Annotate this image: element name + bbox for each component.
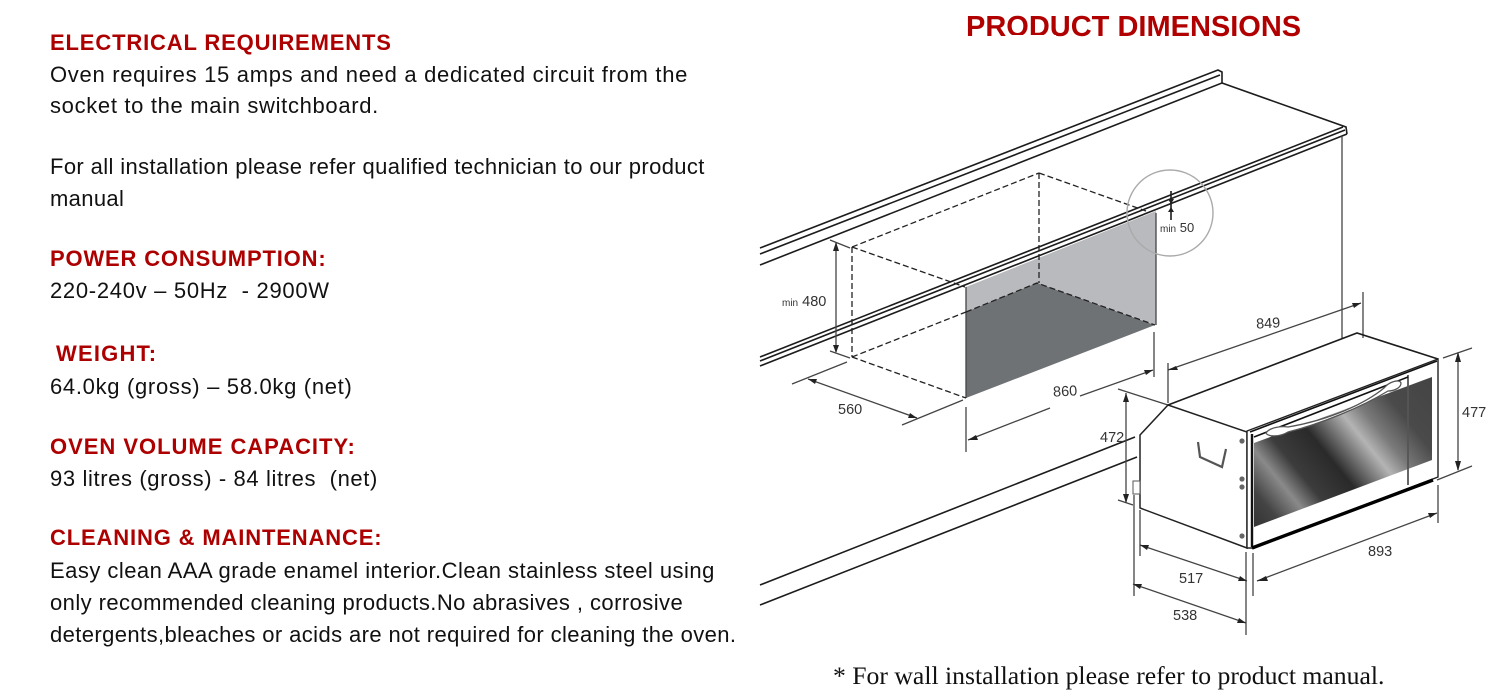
text: weight values: 64.0kg (gross) – 58.0kg (net) [50,374,352,399]
dimension: 517: 517 [1179,571,1203,587]
dimension: 860 [966,332,1154,452]
callout: min 50 clearance: min 50 [1160,220,1194,235]
panel: power consumption [50,246,330,303]
text: cleaning line three: detergents,bleaches or acids are not required for cleaning the oven. [50,622,736,647]
heading: power consumption: POWER CONSUMPTION: [50,246,326,271]
heading: electrical requirements: ELECTRICAL REQUIREMENTS [50,30,392,55]
text: cleaning line one: Easy clean AAA grade enamel interior.Clean stainless steel using [50,558,715,583]
countertop [760,70,1347,366]
dimension: 860: 860 [1053,383,1078,401]
dimension: 538: 538 [1173,608,1197,624]
dimension: 472 [1100,389,1168,505]
dimension: 849: 849 [1256,315,1281,333]
panel: cleaning and maintenance [50,525,736,647]
footnote: wall installation: * For wall installation please refer to product manual. [833,661,1384,690]
dimension: 849 [1168,292,1363,403]
dimension: 560 [792,362,963,425]
title: product dimensions: PRODUCT DIMENSIONS [966,11,1301,43]
dimension: 472: 472 [1100,430,1124,446]
text: cleaning line two: only recommended cleaning products.No abrasives , corrosive [50,590,683,615]
panel: weight [50,341,352,399]
panel: electrical requirements [50,30,705,211]
callout: min 50 clearance [1127,170,1213,256]
oven door handle [1266,381,1401,436]
text: installation note line two: manual [50,186,124,211]
heading: weight: WEIGHT: [56,341,157,366]
text: circuit requirement: Oven requires 15 amps and need a dedicated circuit from the [50,62,688,87]
text: volume values: 93 litres (gross) - 84 litres (net) [50,466,378,491]
text: circuit requirement line two: socket to the main switchboard. [50,93,379,118]
dimension: 517 [1140,510,1247,635]
text: power values: 220-240v – 50Hz - 2900W [50,278,330,303]
dimension: 560: 560 [838,402,862,418]
dimension: 477 [1437,348,1486,480]
oven front with glass door [1247,359,1438,548]
dimension: 477: 477 [1462,405,1486,421]
lower bench lines [760,437,1137,605]
dimension: min 480: min 480 [782,294,826,310]
cut-out dashed outline [852,173,1155,398]
dimension: min 480 [782,240,850,358]
dimension: 893 [1253,485,1438,596]
dimension: 538 [1133,495,1246,624]
panel: oven volume capacity [50,434,378,491]
dimension: 893: 893 [1368,544,1392,560]
text: installation note: For all installation please refer qualified technician to our product [50,154,705,179]
oven side panel [1133,405,1247,548]
oven top panel [1168,333,1438,405]
heading: cleaning and maintenance: CLEANING & MAINTENANCE: [50,525,382,550]
oven [1133,333,1438,548]
heading: oven volume capacity: OVEN VOLUME CAPACITY: [50,434,356,459]
cabinet cut-out: shaded recess [966,211,1156,398]
